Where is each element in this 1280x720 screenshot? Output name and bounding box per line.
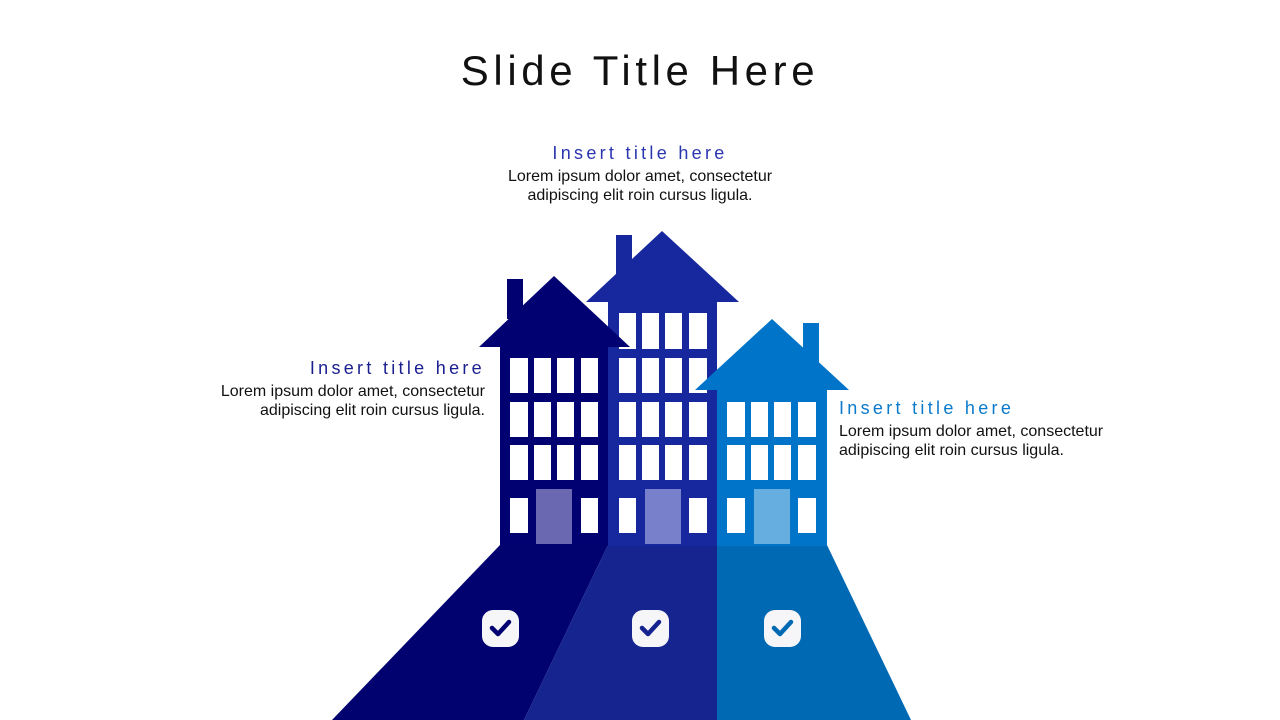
- body: right: [839, 423, 1103, 459]
- icon: check 2: [632, 610, 669, 647]
- body: right: Lorem ipsum dolor amet, consectetur: [839, 423, 1103, 440]
- icon: check 1: [482, 610, 519, 647]
- heading: left: Insert title here: [310, 358, 485, 378]
- text block: right: [839, 398, 1103, 459]
- body: top: adipiscing elit roin cursus ligula.: [528, 187, 752, 204]
- heading: right: Insert title here: [839, 398, 1014, 418]
- building: right: [695, 319, 849, 546]
- body: left: adipiscing elit roin cursus ligula.: [260, 402, 485, 419]
- text block: top: [508, 143, 772, 204]
- body: right: adipiscing elit roin cursus ligula.: [839, 442, 1064, 459]
- building: left: [479, 276, 630, 546]
- ramps: [332, 545, 911, 720]
- body: left: [221, 383, 485, 419]
- text block: left: [221, 358, 485, 419]
- heading: top: Insert title here: [552, 143, 728, 163]
- body: top: Lorem ipsum dolor amet, consectetur: [508, 168, 772, 185]
- building: middle: [586, 231, 739, 546]
- body: left: Lorem ipsum dolor amet, consectetur: [221, 383, 485, 400]
- icon: check 3: [764, 610, 801, 647]
- body: top: [508, 168, 772, 204]
- title: Slide Title Here: [461, 47, 819, 94]
